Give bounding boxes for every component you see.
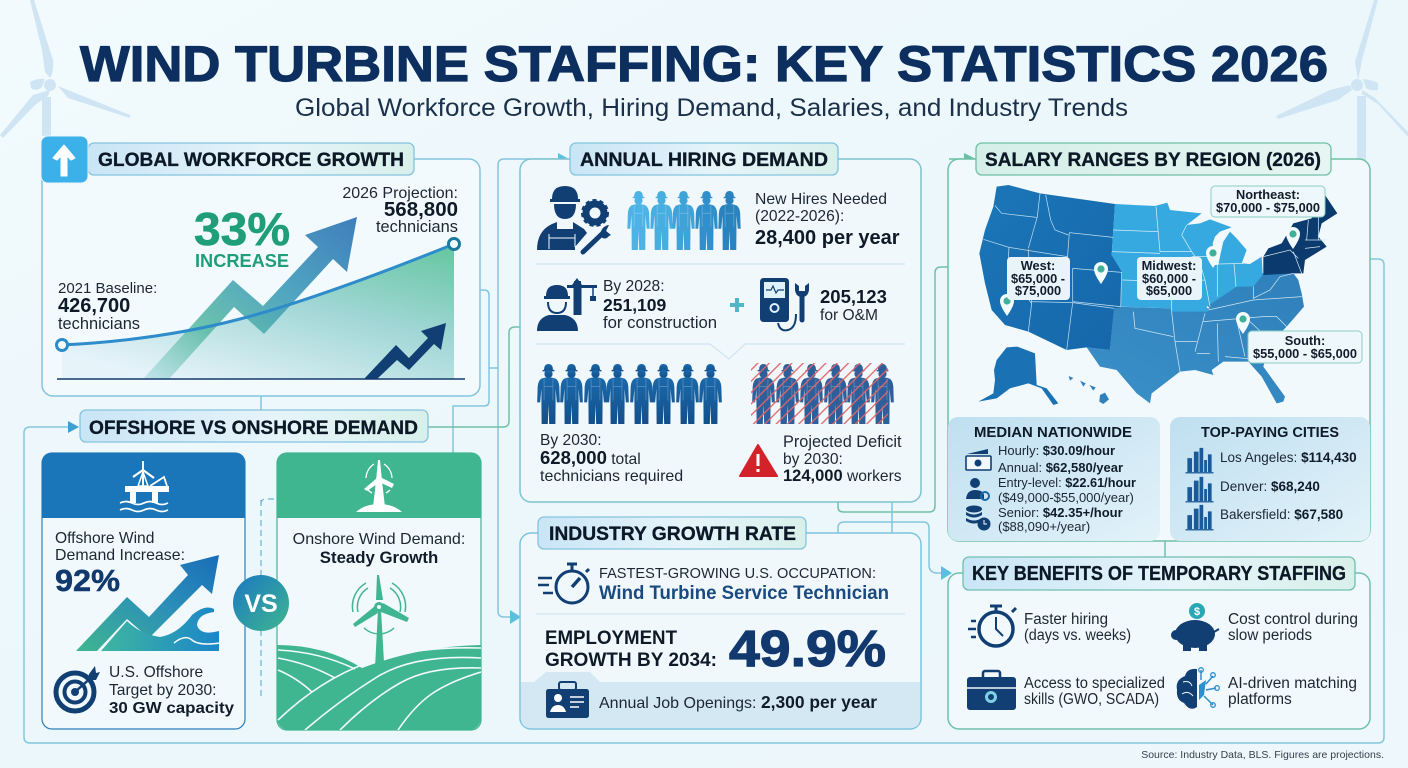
icon: construction worker with crane: [537, 278, 597, 331]
text: job openings: Annual Job Openings:: [599, 695, 756, 712]
row: denver: Denver: $68,240: [1220, 479, 1320, 494]
text: entry level: ($49,000-$55,000/year): [998, 490, 1134, 505]
text: 2026 projection: [342, 185, 458, 236]
text: by 2028 construction: for construction: [603, 313, 717, 332]
text: AI matching: platforms: [1228, 691, 1292, 708]
heading: salary ranges: [976, 143, 1331, 175]
map region: midwest: [1112, 203, 1263, 312]
text: fastest growing occupation: [599, 565, 889, 604]
heading: annual hiring demand: [570, 143, 838, 175]
icon: up arrow badge: [41, 136, 88, 183]
text: onshore demand: [293, 530, 465, 567]
panel: onshore wind: [277, 453, 481, 730]
text: faster hiring: [1024, 611, 1131, 644]
text: by 2028 construction: 251,109: [603, 295, 667, 315]
icon: warning triangle: [740, 445, 777, 476]
text: entry level: Entry-level: $22.61/hour: [998, 475, 1136, 490]
icon: fast stopwatch: [968, 606, 1016, 646]
label: west: $75,000: [1015, 283, 1061, 298]
icon: faint wind turbine left: [0, 0, 130, 138]
label: south: $55,000 - $65,000: [1253, 346, 1357, 361]
text: by 2030 total: By 2030:: [540, 432, 602, 449]
panel: key benefits of temporary staffing: [948, 557, 1370, 729]
icon: onshore turbine white: [356, 460, 402, 512]
band: annual job openings: [521, 672, 920, 728]
panel: global workforce growth: [41, 136, 480, 396]
icons: location pins: [1000, 227, 1300, 334]
stat: 49.9%: 49.9%: [729, 620, 886, 677]
text: job openings: [599, 692, 877, 712]
text: fastest growing occupation: FASTEST-GROWING U.S. OCCUPATION:: [599, 565, 876, 582]
label: west: $65,000 -: [1011, 271, 1065, 286]
label: midwest: Midwest:: [1142, 258, 1196, 273]
text: cost control: slow periods: [1228, 627, 1312, 644]
heading: industry growth rate: INDUSTRY GROWTH RATE: [549, 524, 796, 545]
text: employment growth: GROWTH BY 2034:: [545, 650, 717, 671]
icon: money: [966, 449, 991, 470]
row: los angeles: [1186, 448, 1357, 473]
text: entry level: [998, 475, 1136, 505]
text: by 2028 construction: [603, 278, 717, 332]
map region: south: [1087, 273, 1304, 403]
label: midwest: $60,000 -: [1142, 271, 1196, 286]
icon: coins with clock: [966, 506, 990, 530]
icon: offshore rig: [120, 461, 169, 512]
heading: global workforce growth: [88, 143, 414, 175]
text: offshore target: U.S. Offshore: [109, 664, 203, 681]
icon: target: [56, 666, 100, 711]
callout: 33% increase: 33%: [194, 203, 290, 255]
icon: piggy bank: $: [1194, 606, 1200, 618]
label: midwest: [1137, 257, 1202, 300]
icon: five workers: [627, 191, 741, 250]
text: specialized skills: Access to specialized: [1024, 675, 1165, 692]
text: new hires needed: (2022-2026):: [755, 208, 844, 225]
icon: stopwatch: [538, 564, 589, 603]
heading: median nationwide: MEDIAN NATIONWIDE: [974, 425, 1132, 441]
row: bakersfield: [1186, 505, 1343, 530]
text: projected deficit: [783, 433, 902, 485]
label: west: [1007, 257, 1070, 300]
text: O&M: 205,123: [820, 286, 887, 307]
icon: piggy bank: [1171, 603, 1219, 651]
heading: annual hiring demand: ANNUAL HIRING DEMAND: [580, 150, 828, 171]
text: fastest growing occupation: Wind Turbine Service Technician: [599, 583, 889, 604]
panel: annual hiring demand: [520, 143, 921, 502]
text: senior: [998, 505, 1123, 534]
text: 2021 baseline: [58, 280, 157, 333]
label: northeast: [1211, 186, 1325, 217]
text: projected deficit: by 2030:: [783, 451, 843, 468]
text: onshore demand: Onshore Wind Demand:: [293, 530, 465, 548]
icon: person with gear: [966, 478, 989, 500]
text: projected deficit: 124,000 workers: [783, 467, 902, 485]
icon: diagnostic device and wrench: [760, 278, 809, 330]
text: offshore target: Target by 2030:: [109, 682, 216, 699]
map region: northeast: [1263, 195, 1337, 275]
panel: industry growth rate: [520, 517, 921, 729]
text: by 2030 total: 628,000 total: [540, 447, 641, 468]
panel: salary ranges by region: [948, 143, 1370, 541]
heading: key benefits: KEY BENEFITS OF TEMPORARY STAFFING: [972, 563, 1346, 585]
icon: id badge: [546, 682, 589, 718]
text: job openings: 2,300 per year: [761, 692, 877, 712]
text: cost control: Cost control during: [1228, 611, 1358, 628]
map region: west: [979, 185, 1123, 350]
text: hourly and annual: [998, 443, 1123, 475]
icon: plus: [730, 298, 744, 312]
text: offshore target: 30 GW capacity: [109, 700, 234, 717]
text: AI matching: [1228, 675, 1357, 708]
connector lines: [24, 153, 1384, 743]
row: denver: [1186, 477, 1320, 502]
text: specialized skills: [1024, 675, 1165, 708]
text: offshore demand increase: Offshore Wind: [55, 530, 154, 547]
area chart: [56, 217, 465, 379]
text: offshore demand increase: 92%: [55, 563, 120, 598]
row: los angeles: Los Angeles: $114,430: [1220, 450, 1357, 465]
text: hourly and annual: Hourly: $30.09/hour: [998, 443, 1115, 458]
text: by 2028 construction: By 2028:: [603, 278, 665, 295]
text: 2021 baseline: technicians: [58, 315, 140, 333]
source note: Source: Industry Data, BLS. Figures are projections.: [1141, 749, 1384, 761]
text: cost control: [1228, 611, 1358, 644]
icon: onshore turbine and fields: [277, 575, 481, 730]
icon: toolbox: [967, 671, 1016, 710]
heading: offshore vs onshore demand: OFFSHORE VS ONSHORE DEMAND: [89, 418, 418, 439]
text: offshore demand increase: [55, 530, 185, 598]
label: northeast: Northeast:: [1236, 187, 1300, 202]
text: specialized skills: skills (GWO, SCADA): [1024, 691, 1159, 708]
text: O&M: for O&M: [820, 307, 878, 324]
text: 2026 projection: technicians: [376, 218, 458, 236]
text: senior: Senior: $42.35+/hour: [998, 505, 1123, 520]
panel: offshore wind: [42, 453, 245, 729]
text: O&M: [820, 286, 887, 324]
map region: alaska: [978, 347, 1058, 405]
text: offshore target: [109, 664, 234, 717]
text: 2026 projection: 2026 Projection:: [342, 185, 458, 202]
label: midwest: $65,000: [1146, 283, 1192, 298]
label: south: South:: [1285, 333, 1325, 348]
subtitle: Global Workforce Growth, Hiring Demand, Salaries, and Industry Trends: [295, 94, 1128, 122]
badge: VS: VS: [244, 590, 278, 618]
heading: top-paying cities: TOP-PAYING CITIES: [1201, 425, 1339, 441]
badge: VS: [233, 575, 289, 631]
text: onshore demand: Steady Growth: [320, 548, 438, 567]
text: projected deficit: Projected Deficit: [783, 433, 902, 451]
label: west: West:: [1021, 258, 1055, 273]
text: faster hiring: Faster hiring: [1024, 611, 1108, 628]
callout: 33% increase: INCREASE: [195, 251, 289, 271]
heading: industry growth rate: [538, 517, 806, 549]
text: 2021 baseline: 2021 Baseline:: [58, 280, 157, 297]
text: new hires needed: [755, 191, 900, 249]
panel: top-paying cities: [1170, 417, 1370, 541]
icon: faint wind turbine right: [1276, 0, 1408, 160]
text: by 2030 total: technicians required: [540, 468, 683, 485]
text: new hires needed: New Hires Needed: [755, 191, 887, 208]
text: new hires needed: 28,400 per year: [755, 227, 900, 249]
text: AI matching: AI-driven matching: [1228, 675, 1357, 692]
row: bakersfield: Bakersfield: $67,580: [1220, 507, 1343, 522]
text: senior: ($88,090+/year): [998, 519, 1090, 534]
heading: key benefits: [963, 557, 1355, 590]
text: 2026 projection: 568,800: [384, 198, 458, 221]
icon: growth arrow with wave: [76, 555, 220, 651]
heading: salary ranges: SALARY RANGES BY REGION (2026): [985, 150, 1321, 171]
text: by 2030 total: [540, 432, 683, 485]
icon: eight workers: [537, 364, 722, 424]
map region: hawaii: [1069, 376, 1109, 404]
panel: median nationwide: [948, 417, 1160, 541]
label: south: [1248, 331, 1362, 363]
text: faster hiring: (days vs. weeks): [1024, 627, 1131, 644]
title: WIND TURBINE STAFFING: KEY STATISTICS 2026: [80, 36, 1328, 92]
text: 2021 baseline: 426,700: [58, 295, 130, 317]
icon: technician with gear and wrench: [537, 186, 611, 252]
icon: hatched deficit workers: [751, 363, 894, 424]
heading: global workforce growth: GLOBAL WORKFORCE GROWTH: [98, 150, 404, 171]
heading: offshore vs onshore demand: [80, 410, 428, 442]
label: northeast: $70,000 - $75,000: [1216, 200, 1320, 215]
text: hourly and annual: Annual: $62,580/year: [998, 460, 1123, 475]
text: employment growth: EMPLOYMENT: [545, 628, 677, 649]
icon: AI brain: [1177, 668, 1219, 709]
text: offshore demand increase: Demand Increase:: [55, 547, 185, 564]
text: employment growth: [545, 628, 717, 671]
map: United States: [978, 185, 1337, 405]
